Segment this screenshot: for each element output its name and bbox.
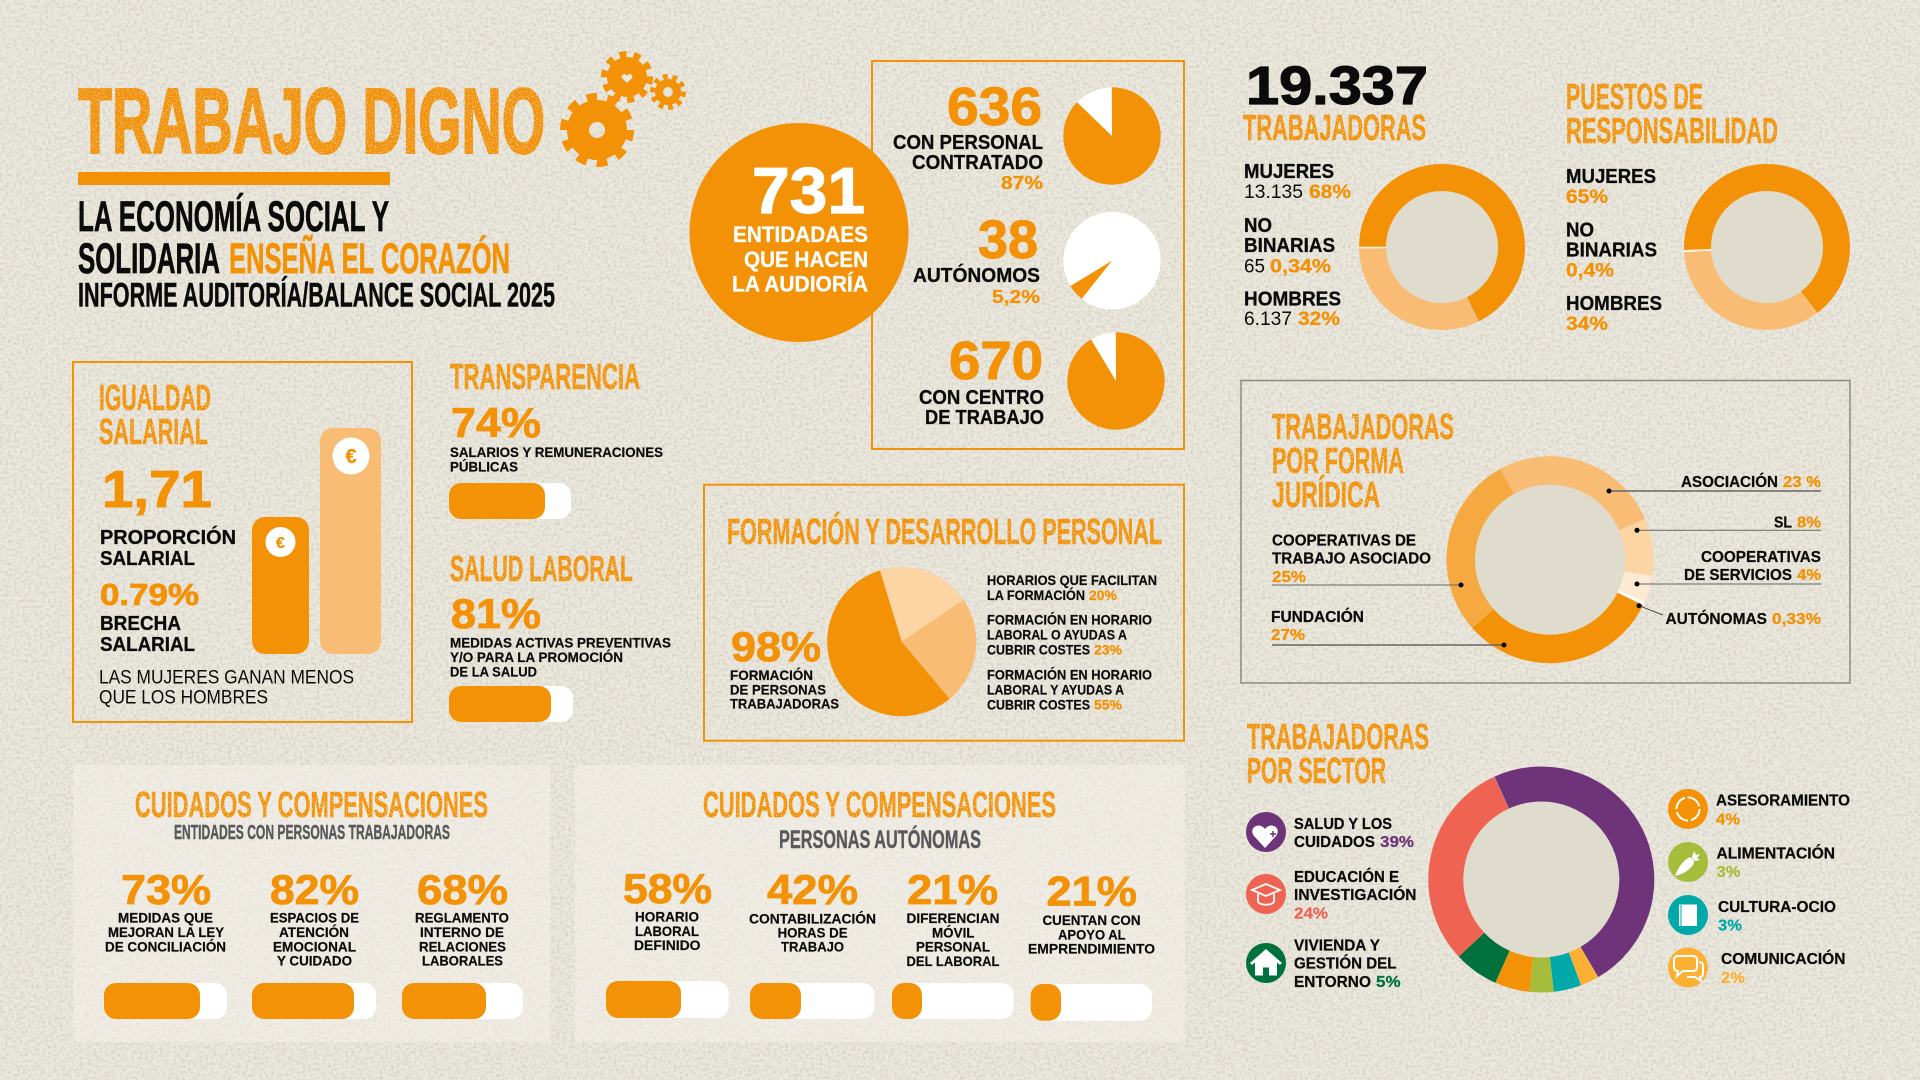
legend: horarios: HORARIOS QUE FACILITAN: [987, 572, 1157, 588]
heading: cuidados entidades: [135, 784, 488, 844]
stat: proporción salarial: PROPORCIÓN: [100, 525, 236, 549]
stat: 68%: RELACIONES: [419, 939, 506, 955]
progress bar: 21% diferencian: [892, 983, 1014, 1019]
panel: puestos de responsabilidad: [1566, 76, 1864, 344]
legend: no binarias: 65: [1244, 256, 1265, 278]
legend: cultura-ocio: [1718, 899, 1836, 934]
label: fundación: [1271, 607, 1506, 648]
callout: 731 entidades: QUE HACEN: [744, 247, 868, 272]
stat: 21% diferencian: MÓVIL: [932, 923, 975, 940]
stat: 68%: INTERNO DE: [420, 924, 504, 940]
stat: 82%: [270, 866, 359, 969]
icon: heart: [1246, 812, 1286, 852]
label: asociación: ASOCIACIÓN: [1681, 472, 1778, 491]
row: con centro de trabajo: [919, 331, 1044, 429]
row: autónomos: 38: [978, 210, 1038, 270]
legend: hombres: 34%: [1566, 314, 1608, 335]
legend: mujeres: 68%: [1309, 182, 1351, 203]
legend: no binarias: BINARIAS: [1244, 235, 1335, 257]
legend: no binarias: 0,4%: [1566, 260, 1614, 282]
stat: 58%: DEFINIDO: [634, 937, 701, 953]
legend: no binarias: [1566, 220, 1657, 282]
label: cooperativas de servicios: 4%: [1797, 567, 1821, 584]
legend: hombres: [1566, 293, 1662, 335]
row: autónomos: AUTÓNOMOS: [913, 263, 1040, 287]
heading: puestos de responsabilidad: RESPONSABILIDAD: [1566, 110, 1778, 151]
progress bar: 58%: [606, 981, 729, 1018]
legend: hombres: 32%: [1298, 309, 1340, 330]
stat: 73%: DE CONCILIACIÓN: [105, 938, 226, 955]
label: cooperativas de servicios: [1634, 549, 1821, 586]
stat: 74%: 74%: [451, 399, 541, 446]
legend: mujeres: 13.135: [1244, 182, 1303, 203]
stat: brecha salarial: SALARIAL: [100, 634, 195, 656]
legend: formación o ayudas: CUBRIR COSTES: [987, 641, 1090, 657]
heading: igualdad salarial: SALARIAL: [99, 411, 208, 452]
progress bar: 73%: [104, 983, 227, 1019]
note: las mujeres ganan menos: QUE LOS HOMBRES: [99, 688, 268, 708]
stat: brecha salarial: [100, 577, 199, 656]
progress bar: 68%: [402, 983, 523, 1019]
legend: formación o ayudas: [987, 610, 1152, 657]
subtitle: INFORME AUDITORÍA/BALANCE SOCIAL 2025: [78, 276, 555, 314]
description: medidas activas: MEDIDAS ACTIVAS PREVENTIVAS: [450, 634, 671, 650]
stat: proporción salarial: [100, 461, 236, 570]
progress bar: 81%: [449, 686, 573, 722]
stat: 98%: FORMACIÓN: [730, 666, 813, 683]
label: autónomas: 0,33%: [1772, 611, 1821, 628]
stat: 21% diferencian: DIFERENCIAN: [906, 910, 1000, 926]
stat: 58%: [623, 865, 712, 953]
legend: horarios: 20%: [1089, 587, 1118, 603]
description: medidas activas: [450, 634, 671, 680]
heading: igualdad salarial: [99, 377, 211, 452]
heading: por forma jurídica: JURÍDICA: [1272, 474, 1380, 515]
panel: trabajadoras por forma jurídica: [1241, 380, 1850, 686]
callout: 731 entidades: 731: [752, 154, 865, 227]
callout: 731 entidades: LA AUDIORÍA: [732, 272, 868, 296]
row: con personal contratado: CONTRATADO: [912, 152, 1043, 174]
heading: trabajadoras: TRABAJADORAS: [1243, 107, 1426, 148]
panel: entidades: [872, 61, 1184, 449]
panel: trabajadoras: [1243, 56, 1535, 340]
label: SL: [1634, 514, 1821, 533]
stat: 98%: [730, 623, 839, 712]
legend: alimentación: ALIMENTACIÓN: [1716, 844, 1835, 862]
stat: 21% cuentan: 21%: [1046, 868, 1137, 915]
legend: vivienda: [1294, 938, 1401, 991]
legend: alimentación: [1716, 844, 1835, 881]
heading: salud laboral: SALUD LABORAL: [450, 548, 633, 589]
label: autónomas: AUTÓNOMAS: [1666, 609, 1767, 628]
icon: gears: [565, 55, 684, 162]
legend: comunicación: [1721, 949, 1846, 987]
row: con personal contratado: 636: [947, 77, 1042, 137]
panel: formación y desarrollo personal: [704, 485, 1184, 741]
progress bar: 21% cuentan: [1031, 984, 1152, 1021]
stat: 68%: REGLAMENTO: [415, 910, 509, 926]
description: salarios: SALARIOS Y REMUNERACIONES: [450, 444, 663, 460]
row: con personal contratado: 87%: [1001, 173, 1043, 193]
legend: hombres: HOMBRES: [1566, 293, 1662, 315]
legend: asesoramiento: 4%: [1716, 812, 1740, 828]
stat: 42%: TRABAJO: [781, 939, 844, 955]
stat: 21% diferencian: DEL LABORAL: [906, 953, 1000, 969]
stat: 21% cuentan: CUENTAN CON: [1042, 912, 1140, 928]
legend: salud y cuidados: CUIDADOS: [1294, 834, 1375, 851]
stat: 82%: EMOCIONAL: [273, 939, 356, 955]
heading: cuidados autónomas: PERSONAS AUTÓNOMAS: [779, 824, 981, 854]
panel: igualdad salarial: [73, 362, 412, 722]
progress bar: 82%: [252, 983, 376, 1019]
pie chart: formación: [827, 567, 976, 716]
legend: cultura-ocio: 3%: [1718, 918, 1742, 934]
panel: cuidados entidades: [73, 765, 550, 1042]
donut chart: trabajadoras: [1349, 154, 1535, 340]
heading: puestos de responsabilidad: [1566, 76, 1778, 151]
heading: por sector: POR SECTOR: [1247, 750, 1386, 791]
callout: 731 entidades: ENTIDADAES: [733, 222, 868, 247]
legend: horarios: LA FORMACIÓN: [987, 586, 1085, 603]
legend: hombres: [1244, 288, 1341, 330]
stat: proporción salarial: SALARIAL: [100, 548, 195, 570]
legend: formación y ayudas: 55%: [1094, 696, 1123, 712]
legend: hombres: 6.137: [1244, 309, 1292, 330]
row: con personal contratado: [893, 77, 1043, 193]
heading: igualdad salarial: IGUALDAD: [99, 377, 211, 418]
legend: mujeres: MUJERES: [1244, 161, 1334, 183]
stat: 21% diferencian: PERSONAL: [916, 939, 990, 955]
icon: speech bubbles: [1668, 948, 1708, 988]
legend: mujeres: 65%: [1566, 187, 1608, 208]
stat: 58%: 58%: [623, 865, 712, 912]
heading: cuidados autónomas: CUIDADOS Y COMPENSACIONES: [703, 784, 1056, 825]
description: medidas activas: Y/O PARA LA PROMOCIÓN: [450, 648, 623, 665]
row: con centro de trabajo: 670: [949, 331, 1043, 391]
panel: trabajadoras por sector: [1246, 716, 1850, 1014]
legend: formación y ayudas: FORMACIÓN EN HORARIO: [987, 665, 1152, 682]
legend: no binarias: NO: [1566, 220, 1594, 242]
panel: salud laboral: [449, 548, 671, 722]
label: cooperativas de trabajo asociado: TRABAJO ASOCIADO: [1272, 550, 1431, 568]
stat: 68%: LABORALES: [422, 953, 503, 969]
progress bar: 74%: [449, 483, 571, 519]
callout: 731 entidades: [690, 123, 908, 342]
bar chart: salary comparison: €: [276, 535, 285, 552]
progress bar: 42%: [750, 983, 874, 1019]
heading: por sector: [1247, 716, 1429, 791]
stat: 21% cuentan: EMPRENDIMIENTO: [1028, 940, 1155, 956]
stat: 21% diferencian: [906, 866, 1000, 969]
heading: transparencia: TRANSPARENCIA: [450, 356, 640, 397]
stat: 98%: 98%: [731, 623, 821, 670]
icon: graduation cap: [1246, 874, 1286, 914]
subtitle: LA ECONOMÍA SOCIAL Y: [78, 193, 389, 241]
label: fundación: 27%: [1271, 627, 1305, 644]
stat: 42%: CONTABILIZACIÓN: [749, 909, 876, 926]
label: asociación: [1606, 472, 1821, 494]
bar chart: salary comparison: [252, 428, 381, 654]
legend: vivienda: GESTIÓN DEL: [1294, 954, 1397, 972]
stat: 73%: MEJORAN LA LEY: [108, 924, 225, 940]
stat: 73%: [105, 866, 226, 955]
label: cooperativas de trabajo asociado: 25%: [1272, 569, 1306, 586]
legend: no binarias: BINARIAS: [1566, 240, 1657, 262]
heading: por forma jurídica: POR FORMA: [1272, 440, 1404, 481]
stat: 81%: 81%: [451, 590, 541, 637]
row: con centro de trabajo: CON CENTRO: [919, 387, 1044, 409]
legend: vivienda: ENTORNO: [1294, 974, 1371, 991]
panel: cuidados autónomas: [575, 765, 1185, 1042]
donut chart: puestos: [1670, 150, 1864, 344]
label: asociación: 23 %: [1783, 474, 1821, 491]
legend: formación y ayudas: [987, 665, 1152, 712]
heading: por sector: TRABAJADORAS: [1247, 716, 1429, 757]
note: las mujeres ganan menos: LAS MUJERES GANAN MENOS: [99, 668, 354, 688]
subtitle: SOLIDARIA: [78, 235, 220, 283]
legend: formación o ayudas: FORMACIÓN EN HORARIO: [987, 610, 1152, 627]
legend: mujeres: MUJERES: [1566, 166, 1656, 188]
legend: formación y ayudas: CUBRIR COSTES: [987, 696, 1090, 712]
legend: vivienda: VIVIENDA Y: [1294, 938, 1380, 954]
legend: mujeres: [1244, 161, 1351, 203]
stat: 73%: MEDIDAS QUE: [118, 910, 213, 926]
subtitle: [78, 193, 555, 314]
stat: 98%: DE PERSONAS: [730, 681, 826, 697]
label: autónomas: [1636, 603, 1821, 628]
label: cooperativas de trabajo asociado: [1272, 532, 1464, 588]
legend: comunicación: 2%: [1721, 970, 1745, 987]
legend: no binarias: NO: [1244, 215, 1272, 237]
legend: asesoramiento: ASESORAMIENTO: [1716, 792, 1850, 810]
subtitle: ENSEÑA EL CORAZÓN: [229, 234, 510, 283]
label: cooperativas de servicios: DE SERVICIOS: [1684, 567, 1792, 584]
icon: book: [1668, 895, 1708, 935]
legend: salud y cuidados: SALUD Y LOS: [1294, 816, 1392, 833]
stat: 19.337: 19.337: [1246, 56, 1428, 116]
stat: proporción salarial: 1,71: [102, 461, 212, 519]
heading: por forma jurídica: TRABAJADORAS: [1272, 406, 1454, 447]
label: cooperativas de trabajo asociado: COOPERATIVAS DE: [1272, 532, 1416, 550]
legend: mujeres: [1566, 166, 1656, 208]
legend: alimentación: 3%: [1716, 864, 1740, 881]
row: con personal contratado: CON PERSONAL: [893, 132, 1043, 154]
icon: house: [1246, 943, 1286, 983]
legend: formación o ayudas: LABORAL O AYUDAS A: [987, 626, 1127, 642]
heading: por forma jurídica: [1272, 406, 1454, 515]
stat: 42%: 42%: [767, 866, 858, 913]
stat: brecha salarial: BRECHA: [100, 613, 181, 635]
donut chart: sector: [1406, 745, 1676, 1014]
stat: 58%: LABORAL: [635, 923, 699, 939]
legend: educación: INVESTIGACIÓN: [1294, 885, 1416, 904]
legend: no binarias: [1244, 215, 1335, 278]
stat: 73%: 73%: [121, 866, 211, 913]
legend: horarios: [987, 572, 1157, 603]
stat: 42%: HORAS DE: [778, 924, 848, 940]
title: Trabajo Digno: TRABAJO DIGNO: [78, 69, 545, 173]
description: medidas activas: DE LA SALUD: [450, 664, 537, 680]
label: SL: SL: [1774, 514, 1792, 532]
legend: cultura-ocio: CULTURA-OCIO: [1718, 899, 1836, 916]
heading: cuidados autónomas: [703, 784, 1056, 854]
legend: salud y cuidados: 39%: [1380, 834, 1414, 851]
legend: asesoramiento: [1716, 792, 1850, 828]
panel: transparencia: [449, 356, 663, 519]
donut chart: forma jurídica: [1424, 434, 1676, 686]
legend: salud y cuidados: [1294, 816, 1414, 851]
stat: 82%: Y CUIDADO: [277, 953, 352, 969]
legend: no binarias: 0,34%: [1270, 256, 1331, 278]
description: salarios: [450, 444, 663, 474]
legend: vivienda: 5%: [1376, 974, 1401, 991]
title underline bar: [78, 172, 390, 185]
pie chart: 87%: [1063, 87, 1161, 185]
legend: educación: 24%: [1294, 906, 1328, 922]
stat: 58%: HORARIO: [635, 909, 699, 925]
note: las mujeres ganan menos: [99, 668, 354, 708]
heading: cuidados entidades: ENTIDADES CON PERSONAS TRABAJADORAS: [174, 822, 450, 844]
stat: 42%: [749, 866, 876, 955]
row: autónomos: 5,2%: [992, 287, 1040, 307]
heading: puestos de responsabilidad: PUESTOS DE: [1566, 76, 1703, 117]
stat: brecha salarial: 0.79%: [100, 577, 199, 612]
legend: formación y ayudas: LABORAL Y AYUDAS A: [987, 681, 1124, 697]
stat: 82%: ESPACIOS DE: [270, 910, 359, 926]
legend: educación: EDUCACIÓN E: [1294, 867, 1399, 886]
row: con centro de trabajo: DE TRABAJO: [925, 407, 1044, 429]
label: fundación: FUNDACIÓN: [1271, 607, 1364, 626]
stat: 68%: [415, 866, 509, 969]
heading: cuidados entidades: CUIDADOS Y COMPENSACIONES: [135, 784, 488, 825]
icon: asesoramiento: [1668, 789, 1708, 829]
stat: 21% cuentan: APOYO AL: [1058, 926, 1126, 942]
stat: 82%: 82%: [270, 866, 359, 913]
pie chart: 5,2%: [1063, 212, 1161, 309]
icon: carrot: [1668, 842, 1708, 882]
stat: 21% diferencian: 21%: [907, 866, 998, 913]
pie chart: con centro: [1067, 332, 1165, 430]
legend: comunicación: COMUNICACIÓN: [1721, 949, 1846, 968]
description: salarios: PÚBLICAS: [450, 458, 518, 474]
heading: formación: FORMACIÓN Y DESARROLLO PERSONAL: [727, 510, 1162, 552]
stat: 68%: 68%: [417, 866, 508, 913]
legend: educación: [1294, 867, 1416, 922]
label: SL: 8%: [1797, 514, 1821, 532]
legend: hombres: HOMBRES: [1244, 288, 1341, 310]
legend: formación o ayudas: 23%: [1094, 641, 1123, 657]
label: cooperativas de servicios: COOPERATIVAS: [1701, 549, 1821, 566]
row: autónomos: [913, 210, 1040, 307]
stat: 98%: TRABAJADORAS: [730, 696, 839, 712]
bar chart: salary comparison: €: [346, 446, 357, 468]
stat: 21% cuentan: [1028, 868, 1155, 956]
stat: 82%: ATENCIÓN: [279, 923, 349, 940]
